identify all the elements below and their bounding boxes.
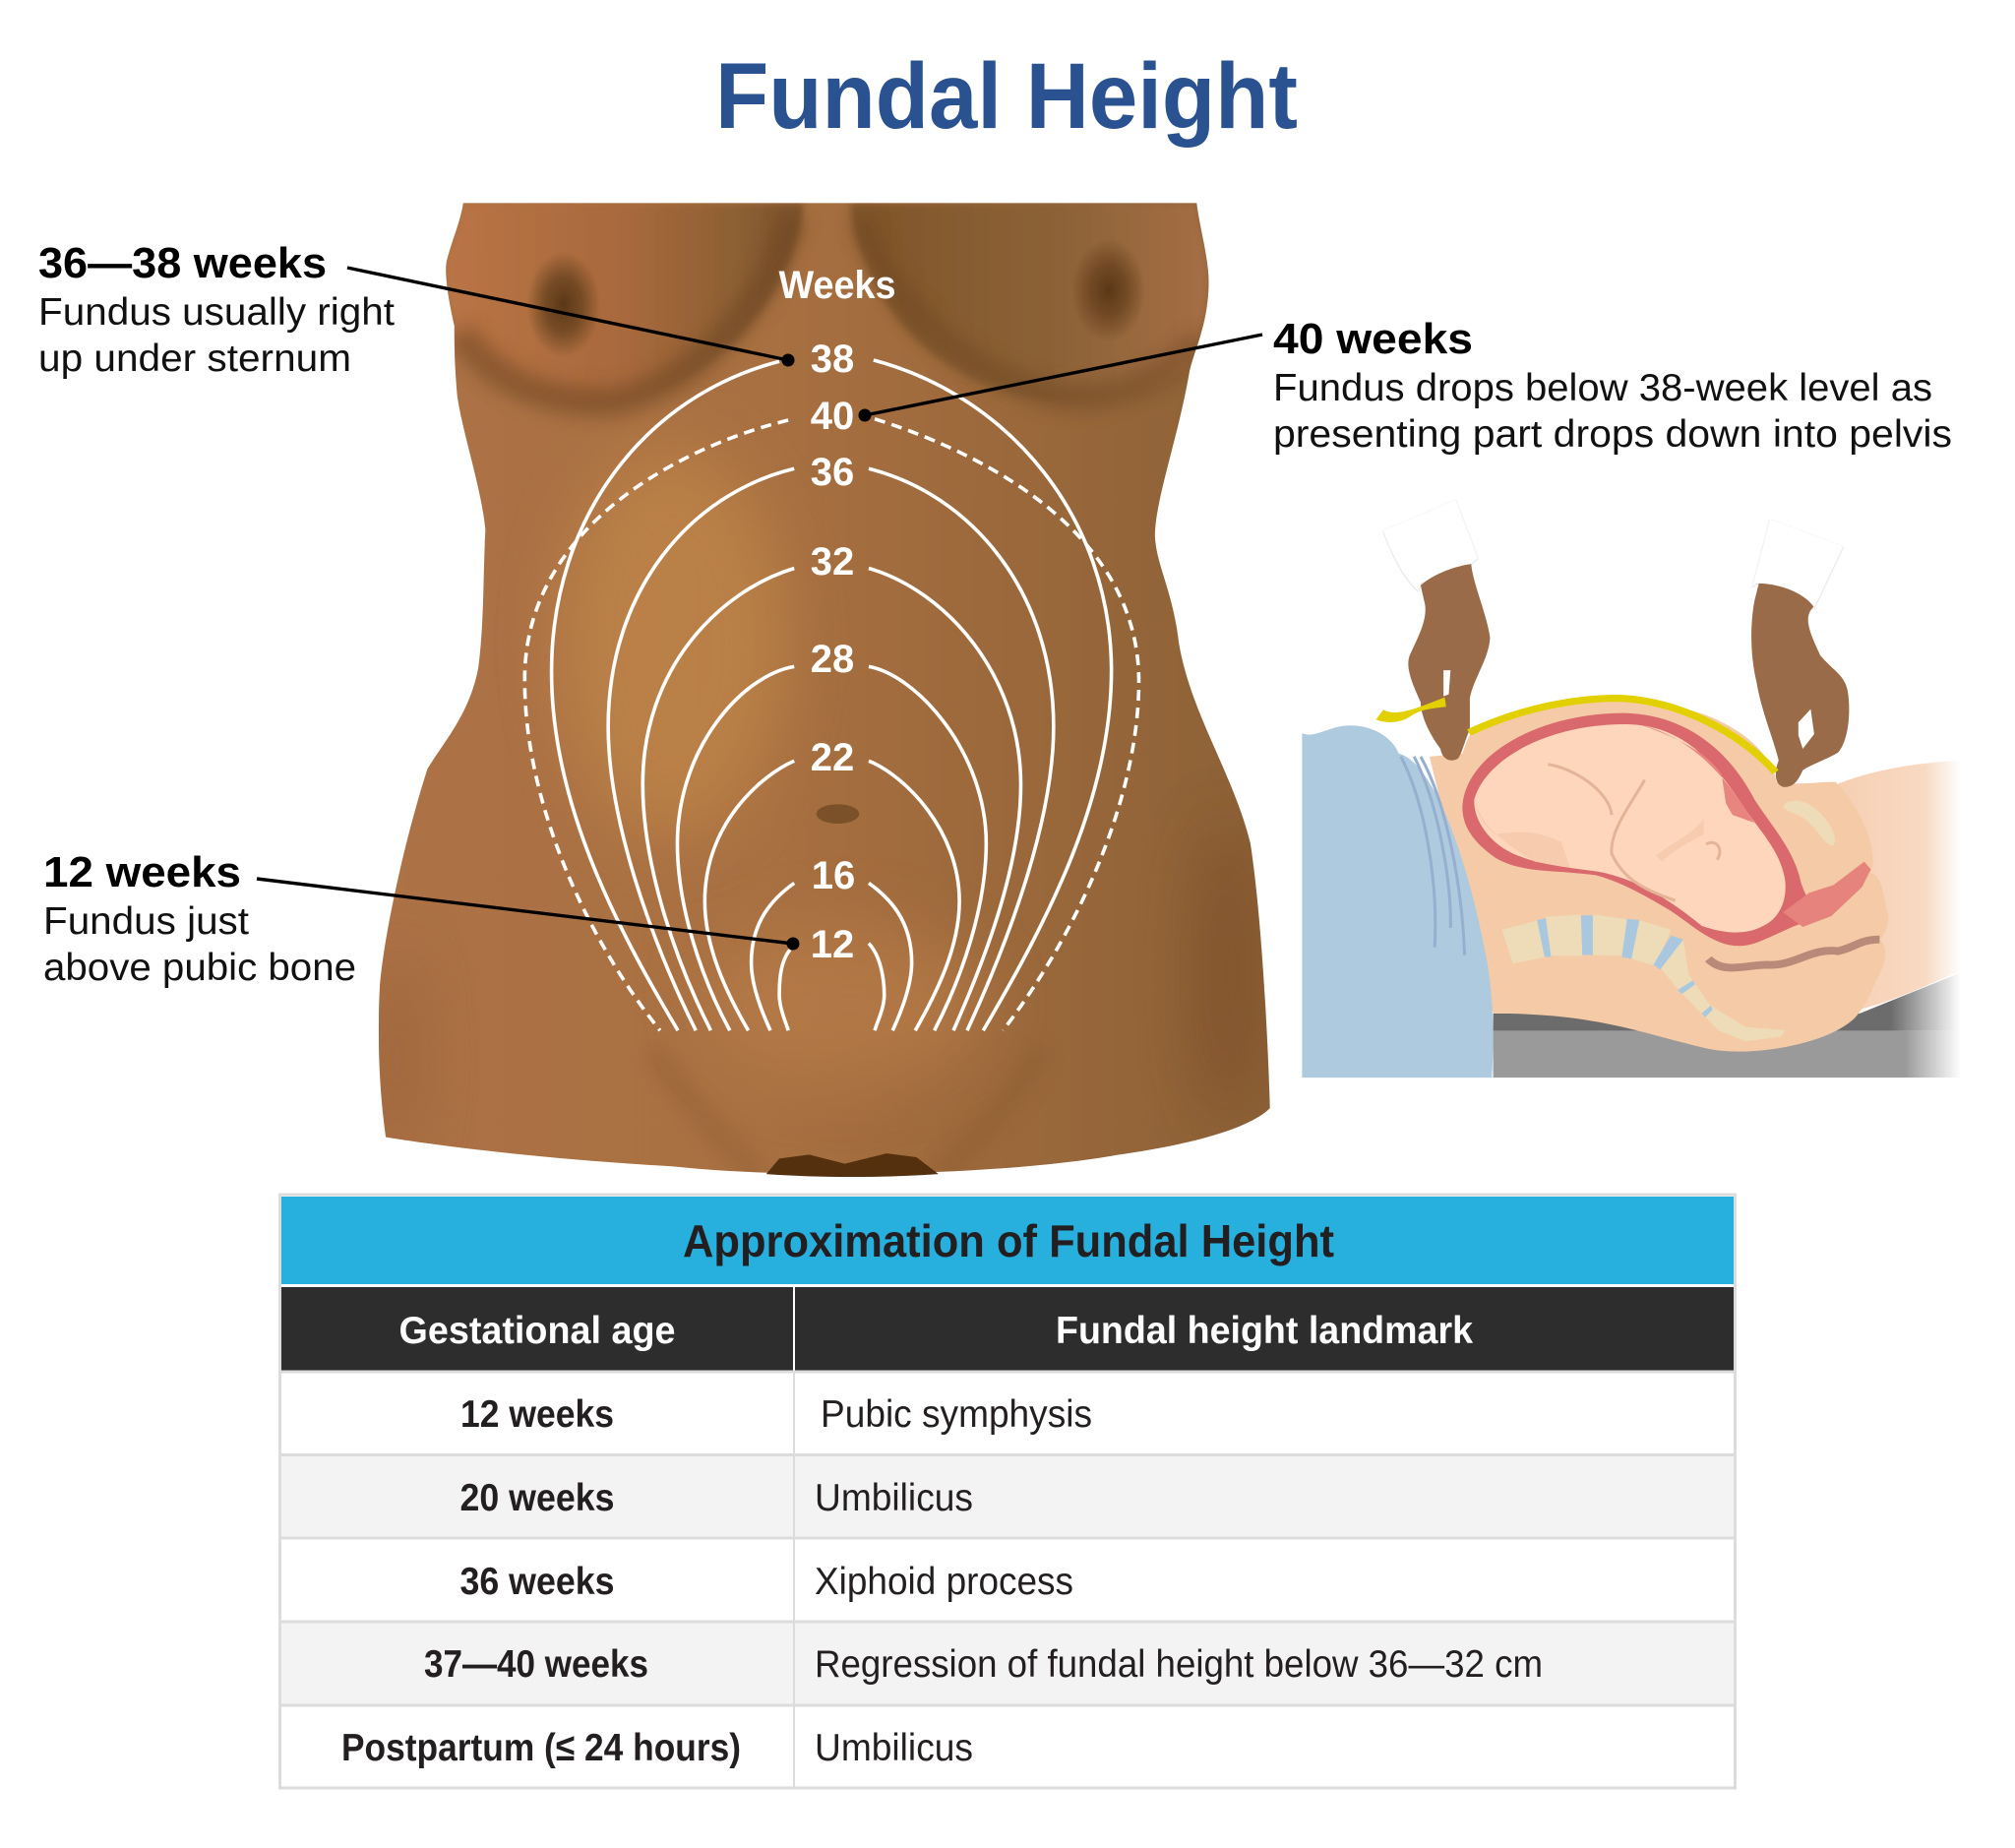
row: 36 weeks: [460, 1561, 1073, 1603]
label: 36: 36: [811, 451, 854, 494]
label: 32: 32: [811, 540, 854, 584]
measuring tape: [1375, 698, 1776, 772]
cervix and vagina: [1783, 862, 1870, 927]
torso body: [374, 177, 1309, 1191]
exam table: [1494, 972, 1961, 1078]
far leg: [1838, 761, 1961, 1010]
row: 37-40 weeks: 37—40 weeks: [424, 1643, 648, 1686]
row: 36 weeks: 36 weeks: [460, 1561, 614, 1603]
callout: 40 weeks: [858, 315, 1952, 456]
callout text: Fundus drops below 38-week level as: [1273, 367, 1932, 409]
callout text: [38, 291, 395, 380]
curve: 22 weeks: [704, 761, 959, 1030]
fetal limbs: [1548, 765, 1720, 900]
table background and frame: [279, 1195, 1736, 1788]
callout heading: 12 weeks: [43, 848, 241, 896]
rectum: [1708, 940, 1879, 967]
amniotic cavity and fetus: [1474, 724, 1786, 933]
curve: 16 weeks: [752, 883, 912, 1030]
spine: [1502, 914, 1785, 1041]
callout text: up under sternum: [38, 338, 351, 380]
title: Fundal Height: [715, 44, 1298, 149]
label: 16: 16: [812, 854, 855, 897]
table row shading: [281, 1454, 1734, 1705]
row: 37-40 weeks: Regression of fundal height below 36—32 cm: [815, 1643, 1543, 1686]
row: postpartum: [341, 1727, 973, 1769]
leader line: [347, 268, 795, 366]
panel: torso illustration: [374, 177, 1309, 1191]
left cuff: [1383, 500, 1478, 591]
uterus: [1462, 713, 1813, 946]
row: 37-40 weeks: [424, 1643, 1543, 1686]
table title bar: Approximation of Fundal Height: [683, 1215, 1334, 1266]
row: 12 weeks: [460, 1393, 1092, 1436]
intervertebral discs: [1537, 915, 1713, 1017]
label: 12: 12: [811, 923, 854, 966]
table header row: [281, 1287, 1734, 1371]
navel: [817, 804, 859, 824]
label: 28: 28: [811, 638, 854, 681]
panel: fundal height measurement illustration: [1302, 500, 1961, 1078]
curve: 12 weeks: [779, 944, 885, 1030]
table title bar: [281, 1197, 1734, 1284]
curve: 28 weeks: [677, 666, 986, 1030]
row: 20 weeks: [460, 1477, 973, 1519]
curve: 36 weeks: [608, 468, 1054, 1030]
table header row: Gestational age: [399, 1310, 675, 1352]
curve: 38 weeks: [552, 360, 1112, 1030]
nipple left: [526, 252, 600, 357]
row: 20 weeks: Umbilicus: [815, 1477, 973, 1519]
pubic bone: [1783, 801, 1835, 845]
right hand: [1751, 584, 1849, 787]
curve: 32 weeks: [642, 568, 1021, 1030]
label: 38: 38: [811, 338, 854, 381]
callout text: [43, 900, 356, 989]
table header row: Fundal height landmark: [1056, 1310, 1473, 1352]
leader line: [858, 335, 1262, 421]
callout text: Fundus usually right: [38, 291, 395, 334]
nipple right: [1071, 238, 1145, 342]
placenta: [1640, 724, 1754, 823]
callout heading: 40 weeks: [1273, 315, 1473, 363]
blanket folds: [1401, 757, 1465, 955]
label: 22: 22: [811, 736, 854, 779]
body cross-section: [1430, 702, 1888, 1052]
row: 12 weeks: 12 weeks: [460, 1393, 614, 1436]
callout: 12 weeks: [43, 848, 799, 989]
right cuff: [1752, 520, 1843, 609]
callout text: above pubic bone: [43, 947, 356, 989]
week labels: [779, 264, 895, 966]
blanket: [1302, 725, 1494, 1078]
row: 36 weeks: Xiphoid process: [815, 1561, 1073, 1603]
vertebrae: [1502, 914, 1671, 966]
fundal height curves: [524, 360, 1138, 1030]
curve: 40 weeks dashed: [524, 419, 1138, 1030]
callout text: Fundus just: [43, 900, 249, 943]
leader line: [257, 879, 799, 951]
table: approximation of fundal height: [279, 1195, 1736, 1788]
left hand: [1408, 564, 1490, 761]
row: postpartum: Umbilicus: [815, 1727, 973, 1769]
table grid lines: [279, 1372, 1736, 1787]
pubic hair: [766, 1153, 939, 1177]
row: postpartum: Postpartum (≤ 24 hours): [341, 1727, 741, 1769]
sacrum: [1658, 940, 1785, 1041]
callout text: presenting part drops down into pelvis: [1273, 413, 1952, 456]
callout text: [1273, 367, 1952, 456]
row: 12 weeks: Pubic symphysis: [821, 1393, 1092, 1436]
fetal shadow regions: [1476, 803, 1704, 868]
callout: 36-38 weeks: [38, 239, 795, 380]
label: 40: 40: [811, 395, 854, 438]
row: 20 weeks: 20 weeks: [460, 1477, 614, 1519]
label: Weeks: Weeks: [779, 264, 895, 307]
callout heading: 36—38 weeks: [38, 239, 327, 287]
